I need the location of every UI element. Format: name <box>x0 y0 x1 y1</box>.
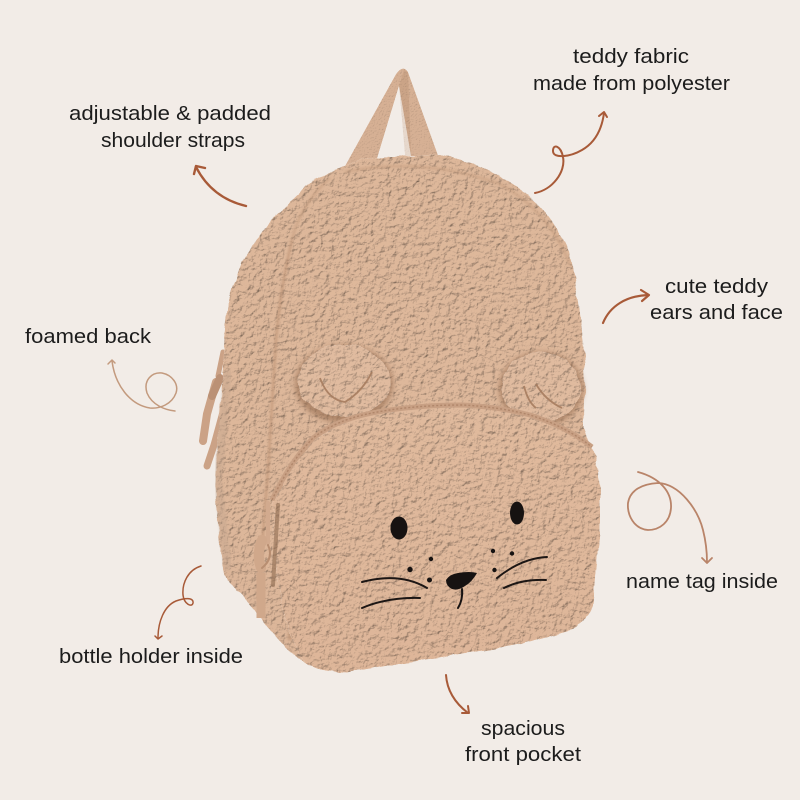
front pocket <box>272 405 600 673</box>
nose <box>446 572 477 590</box>
arrow: teddy fabric <box>535 112 607 193</box>
eyes <box>390 502 524 540</box>
callout: bottle holder: bottle holder inside <box>59 645 243 668</box>
callout: cute ears and face: ears and face <box>650 301 783 324</box>
cat face <box>362 502 547 608</box>
callout: shoulder straps: shoulder straps <box>101 129 245 152</box>
callout: front pocket <box>465 717 581 766</box>
whiskers <box>362 557 547 608</box>
top carry handle <box>345 68 439 166</box>
callout: teddy fabric <box>533 45 730 95</box>
arrow: cute ears and face <box>603 290 649 323</box>
callout: teddy fabric: teddy fabric <box>573 45 689 68</box>
left ear <box>295 345 393 423</box>
right ear <box>499 352 583 426</box>
arrow: shoulder straps <box>194 166 246 206</box>
mouth <box>458 589 462 608</box>
side panel shading and seam <box>218 166 570 600</box>
arrow: bottle holder <box>155 566 201 639</box>
callout: teddy fabric: made from polyester <box>533 72 730 95</box>
main body fleece <box>215 155 599 673</box>
callout: cute ears and face: cute teddy <box>665 275 769 298</box>
side zipper pulls <box>203 352 223 466</box>
callout: name tag: name tag inside <box>626 570 778 593</box>
arrow: front pocket <box>446 675 469 713</box>
front zipper pull <box>259 503 278 618</box>
pocket zipper <box>272 405 592 500</box>
callout: shoulder straps <box>69 102 271 152</box>
callout: cute ears and face <box>650 275 783 324</box>
backpack illustration <box>203 68 600 673</box>
arrow: foamed back <box>108 360 177 411</box>
callout: shoulder straps: adjustable & padded <box>69 102 271 125</box>
callout: front pocket: front pocket <box>465 743 581 766</box>
callout: front pocket: spacious <box>481 717 565 740</box>
arrow: name tag <box>628 472 712 563</box>
callout: foamed back: foamed back <box>25 325 152 348</box>
whisker dots <box>407 549 514 582</box>
